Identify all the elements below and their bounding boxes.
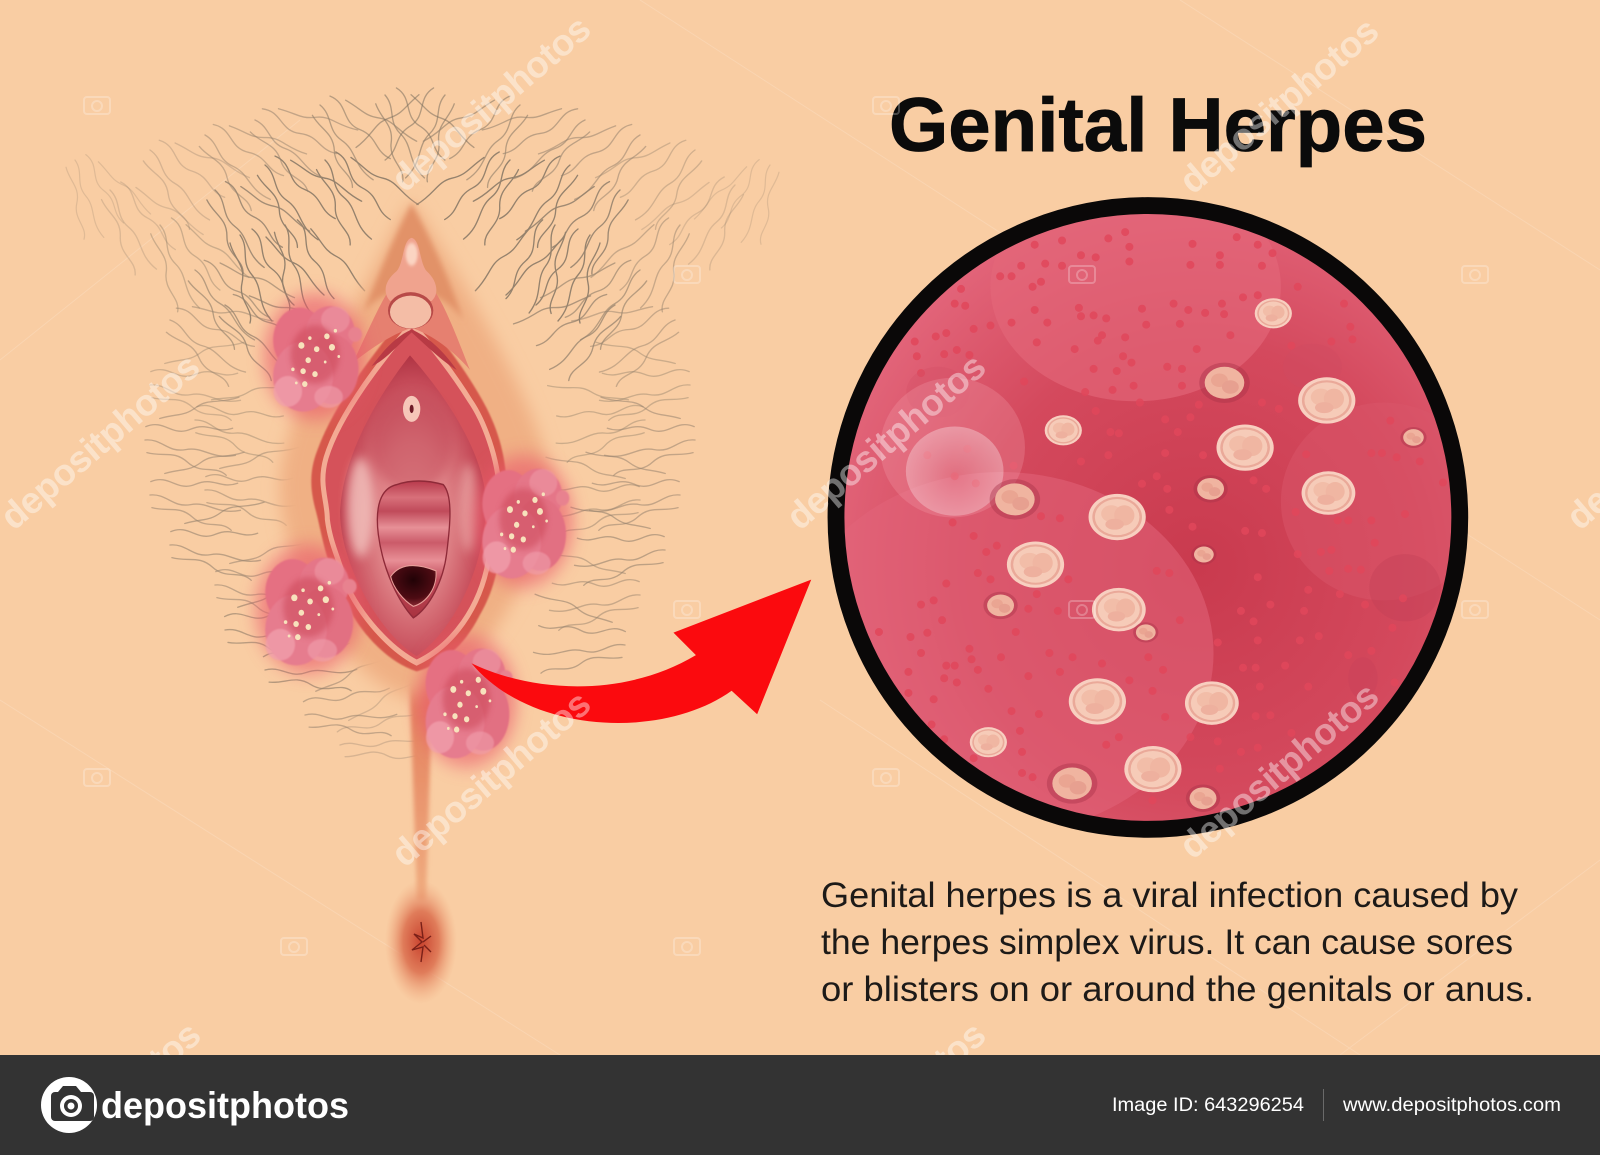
urethral opening	[403, 396, 420, 422]
anus	[385, 880, 457, 1004]
perineum line	[409, 668, 433, 900]
clitoral hood	[353, 268, 470, 370]
title: Genital Herpes	[889, 83, 1427, 168]
arrow from lesion to magnified view	[471, 580, 811, 723]
lesion cluster lower left	[256, 545, 361, 674]
description text	[821, 876, 1534, 1009]
footer bar	[0, 1055, 1600, 1155]
pubic hair surrounding the anatomy	[66, 73, 779, 777]
footer divider	[1323, 1089, 1324, 1121]
red spots	[879, 232, 1443, 800]
blisters	[970, 298, 1427, 812]
lesion cluster lower centre	[417, 635, 517, 767]
description text: Genital herpes is a viral infection caused by	[821, 876, 1519, 915]
description text: the herpes simplex virus. It can cause sores	[821, 923, 1513, 962]
vaginal opening	[377, 481, 450, 618]
description text: or blisters on or around the genitals or anus.	[821, 970, 1534, 1009]
watermarks: depositphotos	[778, 345, 993, 538]
tissue background	[834, 204, 1461, 831]
vestibule	[340, 355, 486, 656]
lesion cluster right	[473, 455, 573, 587]
watermarks: depositphotos	[1171, 674, 1386, 867]
black lens ring	[836, 206, 1460, 829]
image id: Image ID: 643296254	[1112, 1094, 1304, 1116]
watermark camera icons	[84, 97, 1488, 955]
watermarks: depositphotos	[383, 7, 598, 200]
magnified skin circle	[828, 197, 1468, 838]
clitoris	[388, 292, 433, 329]
watermarks: depositphotos	[383, 682, 598, 875]
logo icon: camera	[41, 1077, 97, 1133]
vulva anatomy, scaled group	[280, 201, 550, 699]
logo wordmark: depositphotos	[101, 1085, 349, 1126]
website: www.depositphotos.com	[1342, 1094, 1561, 1116]
translucent bubble	[880, 367, 1025, 517]
lesion cluster upper left	[264, 293, 366, 420]
watermarks: depositphotos	[1171, 9, 1386, 202]
anatomy illustration with lesions	[256, 201, 573, 1004]
